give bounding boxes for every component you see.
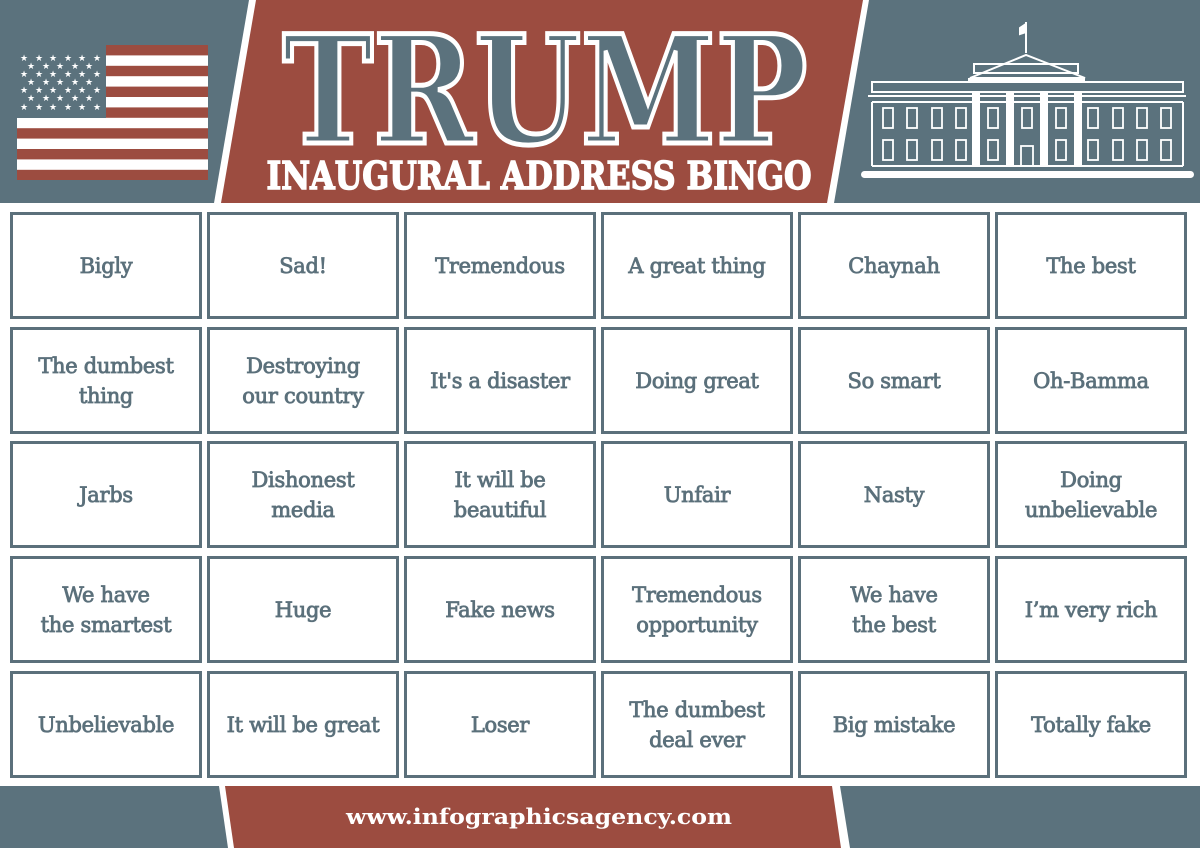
icon: american flag: ★ (20, 70, 28, 80)
row 3: Jarbs (79, 482, 133, 506)
panel: center red (221, 0, 863, 203)
bingo grid: A great thing (628, 254, 766, 278)
icon: american flag: ★ (35, 54, 43, 64)
icon: american flag: ★ (20, 103, 28, 113)
panel: left slate (0, 0, 249, 203)
bingo grid: Nasty (864, 482, 924, 506)
icon: american flag: ★ (49, 70, 57, 80)
icon: american flag: ★ (64, 86, 72, 96)
icon: american flag: ★ (49, 54, 57, 64)
icon: american flag: ★ (56, 62, 64, 72)
icon: american flag: ★ (56, 94, 64, 104)
header (0, 0, 1200, 203)
icon: american flag: ★ (78, 103, 86, 113)
row 4 (10, 556, 202, 663)
icon: american flag: ★ (42, 62, 50, 72)
bingo grid: Big mistake (833, 712, 955, 736)
bingo grid: unbelievable (1025, 498, 1157, 522)
footer url: www.infographicsagency.com (345, 804, 732, 829)
footer left slate (0, 786, 228, 848)
bingo grid: Tremendous (435, 254, 565, 278)
bingo grid: It will be great (227, 712, 379, 736)
icon: american flag: ★ (27, 94, 35, 104)
icon: american flag: ★ (93, 86, 101, 96)
icon: american flag: ★ (49, 103, 57, 113)
bingo grid: Doing great (635, 368, 759, 392)
subtitle: INAUGURAL ADDRESS BINGO (266, 153, 812, 198)
row 1: Bigly (80, 254, 132, 278)
icon: american flag: ★ (78, 86, 86, 96)
panel: right slate (834, 0, 1200, 203)
bingo grid: Loser (471, 712, 529, 736)
bingo grid: Sad! (279, 254, 327, 278)
icon: american flag: ★ (42, 94, 50, 104)
row 3 (10, 441, 202, 548)
footer (0, 786, 1200, 848)
icon: american flag: ★ (64, 54, 72, 64)
icon: american flag: ★ (35, 103, 43, 113)
icon: american flag: ★ (64, 70, 72, 80)
row 4: We have (62, 582, 150, 606)
icon: white house (868, 22, 1186, 166)
icon: american flag: ★ (27, 62, 35, 72)
icon: american flag: ★ (71, 94, 79, 104)
icon: american flag: ★ (20, 54, 28, 64)
icon: american flag: ★ (42, 78, 50, 88)
bingo grid: It's a disaster (430, 368, 570, 392)
bingo grid: Huge (275, 598, 331, 622)
footer right slate (840, 786, 1200, 848)
bingo grid: The dumbest (629, 698, 765, 722)
bingo grid: We have (850, 582, 938, 606)
icon: american flag: ★ (93, 54, 101, 64)
row 4: the smartest (41, 612, 171, 636)
bingo grid: Tremendous (632, 582, 762, 606)
white house base (861, 171, 1194, 178)
row 2 (10, 327, 202, 434)
bingo grid: So smart (848, 368, 940, 392)
icon: american flag: ★ (78, 70, 86, 80)
bingo grid: Fake news (445, 598, 555, 622)
bingo grid: deal ever (649, 728, 745, 752)
title: TRUMP (282, 3, 808, 179)
bingo grid: Unfair (664, 482, 730, 506)
bingo grid: It will be (454, 468, 546, 492)
bingo grid: The best (1046, 254, 1136, 278)
icon: american flag: ★ (85, 94, 93, 104)
row 2: thing (79, 384, 133, 408)
icon: american flag (17, 45, 208, 180)
icon: american flag: ★ (64, 103, 72, 113)
icon: american flag: ★ (93, 103, 101, 113)
row 5: Unbelievable (38, 712, 174, 736)
icon: american flag: ★ (27, 78, 35, 88)
icon: american flag: ★ (20, 86, 28, 96)
bingo grid: opportunity (636, 612, 758, 636)
bingo grid: beautiful (454, 498, 546, 522)
icon: american flag: ★ (71, 62, 79, 72)
bingo grid: Oh-Bamma (1033, 368, 1149, 392)
icon: american flag: ★ (49, 86, 57, 96)
icon: american flag: ★ (78, 54, 86, 64)
icon: american flag: ★ (93, 70, 101, 80)
icon: american flag: ★ (71, 78, 79, 88)
bingo grid: Chaynah (848, 254, 940, 278)
bingo grid: the best (852, 612, 936, 636)
bingo grid: our country (242, 384, 364, 408)
icon: american flag: ★ (35, 70, 43, 80)
bingo grid: Dishonest (252, 468, 354, 492)
row 2: The dumbest (38, 354, 174, 378)
bingo grid: media (271, 498, 335, 522)
row 5 (10, 671, 202, 778)
icon: american flag: ★ (85, 78, 93, 88)
footer red band (225, 786, 841, 848)
bingo grid: Doing (1060, 468, 1122, 492)
icon: american flag: ★ (85, 62, 93, 72)
bingo grid: Totally fake (1031, 712, 1151, 736)
bingo grid: I’m very rich (1025, 598, 1157, 622)
icon: american flag: ★ (35, 86, 43, 96)
row 1 (10, 212, 202, 319)
icon: american flag: ★ (56, 78, 64, 88)
bingo grid: Destroying (246, 354, 360, 378)
